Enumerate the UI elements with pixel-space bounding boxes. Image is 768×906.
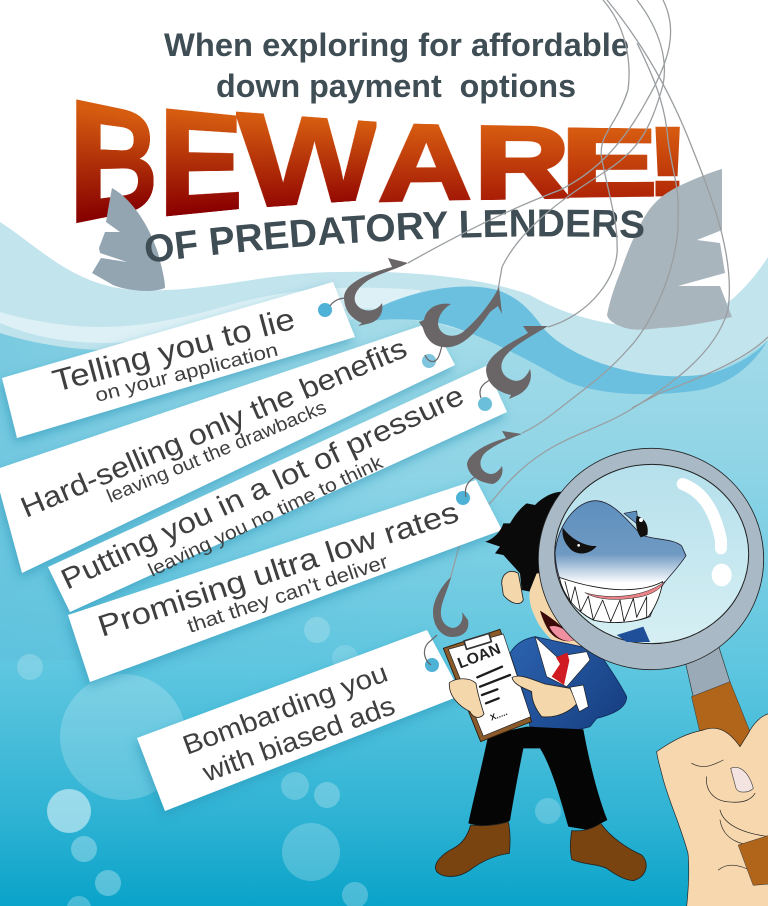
heading line: When exploring for affordable: When exploring for affordable [164,27,629,63]
tag text: Promising ultra low rates [94,496,463,644]
handle bottom [738,835,768,885]
title: BEWARE! [66,60,691,263]
shark head [555,501,686,622]
holding hand [657,713,768,906]
icon: right shark fin [607,169,732,330]
magnifier lens with shark [555,464,749,644]
man's shirt and tie [535,637,590,687]
title: BEWARE!: W [236,83,377,239]
clipboard signature: X..... [489,707,509,723]
shark left eye [562,527,597,553]
jacket seen through lens [617,627,650,642]
shark teeth [565,582,647,622]
hook strings [330,298,490,665]
tag dot [422,354,436,368]
shark gum [585,581,665,599]
tag dot [478,397,492,411]
fishing lines [408,0,768,580]
tag dot [425,658,439,672]
man's right shoe [570,823,646,881]
tag text: Telling you to lie [49,301,298,399]
clipboard label: LOAN: LOAN [455,641,503,672]
panel: tag 1 Telling you to lie [2,282,355,438]
eye glints [577,544,580,547]
icon: hook 2 [419,287,502,347]
tag text: Putting you in a lot of pressure [56,380,469,596]
title: BEWARE!: E [158,76,242,250]
icon: hook 3 [486,326,548,399]
clipboard [443,629,532,742]
man's left hand [449,679,484,717]
heading line: down payment options: down payment options [216,68,576,104]
tag text: first line: Bombarding you [179,658,392,761]
man's hair [485,492,563,592]
shark mouth [559,577,663,622]
man's ear and face [502,571,587,653]
title: BEWARE!: A [378,101,471,225]
magnifier neck [683,640,732,697]
tag subtext: on your application [93,340,280,407]
panel: tag 3 Putting you in a lot of pressure [48,366,507,612]
man's jacket [510,637,627,733]
tag subtext: that they can't deliver [185,551,391,638]
icon: left shark fin [92,188,165,291]
magnifier handle top [692,682,753,760]
tag dot [456,491,470,505]
title: BEWARE!: B [66,60,157,263]
panel: tag 2 Hard-selling [0,322,455,573]
tag dot [318,303,332,317]
lens highlights [683,484,721,548]
title: BEWARE!: ! [644,108,691,216]
man with clipboard, magnifier and hand [435,448,768,906]
tag text: second line: with biased ads [198,690,399,788]
title: BEWARE!: R [474,105,569,220]
shark right eye [636,516,648,537]
shark dorsal bump [624,511,638,525]
man's left shoe [435,822,510,876]
icon: hook 4 [467,431,522,484]
tag text: Hard-selling only the benefits [16,332,412,524]
magnifier ring [538,448,764,670]
panel: tag 4 Promising ultra low rates [68,480,502,682]
tag subtext: leaving you no time to think [145,452,387,582]
panel: tag 5 Bombarding you with biased ads [137,630,462,811]
man's trousers [468,727,607,830]
subtitle: OF PREDATORY LENDERS: OF PREDATORY LENDERS [146,210,644,262]
icon: hook 5 [433,577,468,637]
icon: hook 1 [344,258,408,326]
man's pointing hand and cuff [512,676,588,717]
tag subtext: leaving out the drawbacks [104,397,330,508]
title: BEWARE!: E [562,110,656,216]
